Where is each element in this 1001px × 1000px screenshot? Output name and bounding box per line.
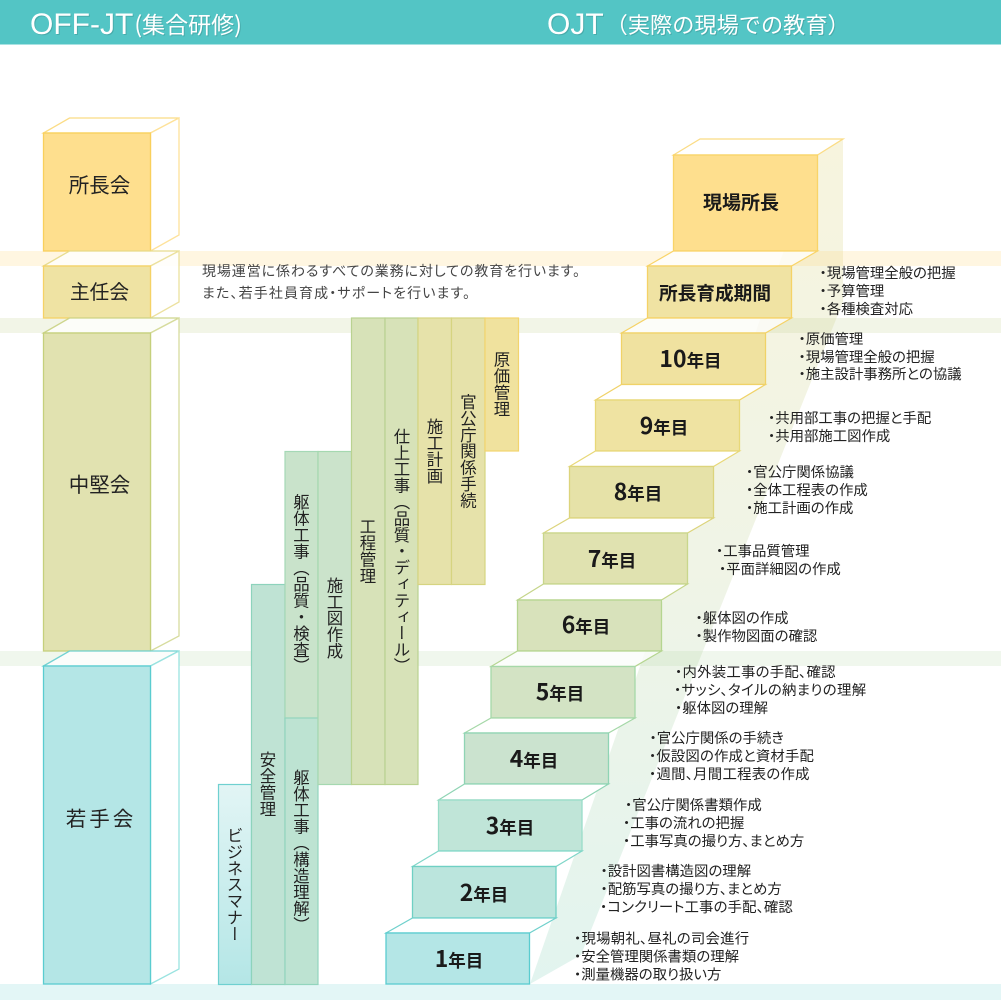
list: 6年目: ・躯体図の作成: [696, 607, 789, 628]
list: 4年目: ・仮設図の作成と資材手配: [649, 745, 814, 766]
step: 1年目: [386, 918, 556, 984]
list: 5年目: ・サッシ、タイルの納まりの理解: [674, 679, 866, 700]
block: 主任会: 主任会: [70, 276, 129, 305]
step: 4年目: [464, 718, 635, 784]
step: 10年目: 10年目: [659, 340, 722, 374]
step: 5年目: 5年目: [536, 673, 584, 707]
intro text: また、若手社員育成・サポートを行います。: [202, 283, 470, 303]
step: 10年目: [622, 318, 792, 384]
list: 1年目: [574, 928, 749, 984]
list: 6年目: ・製作物図面の確認: [696, 625, 818, 646]
strip: 原価管理: [485, 318, 518, 451]
list: 2年目: [600, 860, 793, 917]
list: 3年目: [623, 794, 804, 851]
step: 2年目: [412, 851, 582, 918]
step: 7年目: 7年目: [588, 540, 636, 574]
list: 8年目: ・施工計画の作成: [746, 497, 853, 518]
list: 8年目: ・官公庁関係協議: [746, 461, 854, 482]
strip: 施工計画: 施工計画: [423, 418, 447, 484]
step: 7年目: [544, 518, 714, 584]
list: 7年目: ・平面詳細図の作成: [719, 558, 841, 579]
list: 4年目: ・官公庁関係の手続き: [650, 727, 784, 748]
step: 9年目: [596, 384, 766, 451]
strip: 原価管理: 原価管理: [490, 351, 514, 417]
list: 2年目: ・設計図書構造図の理解: [600, 860, 751, 881]
list: 5年目: [674, 661, 866, 718]
level bands: [0, 251, 1001, 1000]
strip: 工程管理: 工程管理: [356, 518, 380, 584]
strip: 施工図作成: [318, 452, 352, 784]
list: 所長育成期間: ・各種検査対応: [820, 298, 913, 319]
list: 2年目: ・コンクリート工事の手配、確認: [600, 896, 793, 917]
step: 6年目: 6年目: [562, 606, 610, 640]
list: 1年目: ・安全管理関係書類の理解: [574, 946, 739, 966]
strip: 安全管理: 安全管理: [256, 751, 280, 817]
heading: OJT: OJT: [547, 8, 604, 41]
step: 9年目: 9年目: [640, 407, 688, 441]
panel: training subjects: [218, 318, 518, 984]
panel: OJT task lists: [574, 262, 962, 984]
strip: 工程管理: [352, 318, 385, 784]
step: 3年目: [438, 784, 608, 851]
step: 1年目: 1年目: [435, 940, 483, 974]
strip: 官公庁関係手続: 官公庁関係手続: [456, 394, 480, 508]
list: 8年目: [746, 461, 868, 518]
list: 3年目: ・工事写真の撮り方、まとめ方: [623, 830, 804, 851]
list: 5年目: ・躯体図の理解: [675, 697, 768, 718]
strip: 躯体工事（品質・検査）: [285, 452, 318, 718]
list: 9年目: [768, 407, 931, 446]
step: 4年目: 4年目: [510, 740, 558, 774]
list: 3年目: ・官公庁関係書類作成: [625, 794, 762, 815]
block: 中堅会: [44, 318, 179, 651]
list: 5年目: ・内外装工事の手配、確認: [675, 661, 836, 682]
strip: ビジネスマナー: ビジネスマナー: [223, 827, 247, 942]
list: 10年目: ・現場管理全般の把握: [798, 346, 935, 367]
list: 7年目: [716, 540, 841, 579]
list: 10年目: ・施主設計事務所との協議: [798, 363, 962, 384]
step: 8年目: 8年目: [614, 473, 662, 507]
heading: OJT: （実際の現場での教育）: [606, 8, 850, 40]
list: 1年目: ・現場朝礼、昼礼の司会進行: [574, 928, 749, 948]
list: 9年目: ・共用部施工図作成: [768, 425, 890, 446]
strip: 仕上工事（品質・ディティール）: [385, 318, 418, 784]
step: 所長育成期間: [648, 251, 818, 318]
step: 所長育成期間: 所長育成期間: [659, 279, 771, 306]
list: 10年目: ・原価管理: [798, 328, 863, 349]
step: 現場所長: [674, 139, 843, 251]
list: 所長育成期間: ・現場管理全般の把握: [820, 262, 956, 283]
staircase side shade: [530, 139, 843, 984]
block: 若手会: [44, 651, 179, 984]
list: 3年目: ・工事の流れの把握: [623, 812, 744, 833]
list: 8年目: ・全体工程表の作成: [746, 479, 868, 500]
intro text: 現場運営に係わるすべての業務に対しての教育を行います。: [202, 261, 580, 281]
panel: OJT staircase: [386, 139, 843, 984]
header bar: [0, 0, 1001, 45]
strip: 仕上工事（品質・ディティール）: 仕上工事（品質・ディティール）: [390, 428, 414, 674]
strip: 安全管理: [252, 584, 285, 984]
step: 現場所長: 現場所長: [703, 188, 779, 215]
step: 8年目: [570, 451, 740, 518]
block: 所長会: [44, 118, 179, 251]
step: 5年目: [491, 651, 662, 718]
block: 中堅会: 中堅会: [69, 468, 130, 498]
list: 2年目: ・配筋写真の撮り方、まとめ方: [600, 878, 782, 899]
step: 3年目: 3年目: [486, 807, 534, 841]
list: 10年目: [798, 328, 962, 384]
list: 1年目: ・測量機器の取り扱い方: [574, 964, 721, 984]
list: 4年目: [649, 727, 814, 784]
list: 4年目: ・週間、月間工程表の作成: [649, 763, 810, 784]
strip: 躯体工事（品質・検査）: 躯体工事（品質・検査）: [290, 494, 314, 674]
block: 若手会: 若手会: [66, 802, 136, 832]
intro text: [202, 261, 580, 303]
block: 主任会: [44, 251, 179, 318]
list: 6年目: [696, 607, 818, 646]
strip: 施工計画: [418, 318, 452, 584]
step: 2年目: 2年目: [460, 874, 508, 908]
strip: 躯体工事（構造理解）: [285, 718, 318, 984]
step: 6年目: [518, 584, 688, 651]
strip: 施工図作成: 施工図作成: [323, 577, 347, 660]
heading: OFF-JT: (集合研修): [134, 6, 242, 40]
list: 所長育成期間: [820, 262, 956, 319]
strip: ビジネスマナー: [218, 784, 252, 984]
strip: 官公庁関係手続: [452, 318, 485, 584]
panel: OFF-JT blocks: [44, 118, 179, 984]
heading: OFF-JT: OFF-JT: [30, 8, 133, 41]
block: 所長会: 所長会: [69, 168, 130, 198]
strip: 躯体工事（構造理解）: 躯体工事（構造理解）: [290, 769, 314, 933]
list: 9年目: ・共用部工事の把握と手配: [768, 407, 931, 428]
list: 所長育成期間: ・予算管理: [820, 280, 884, 301]
list: 7年目: ・工事品質管理: [716, 540, 810, 561]
